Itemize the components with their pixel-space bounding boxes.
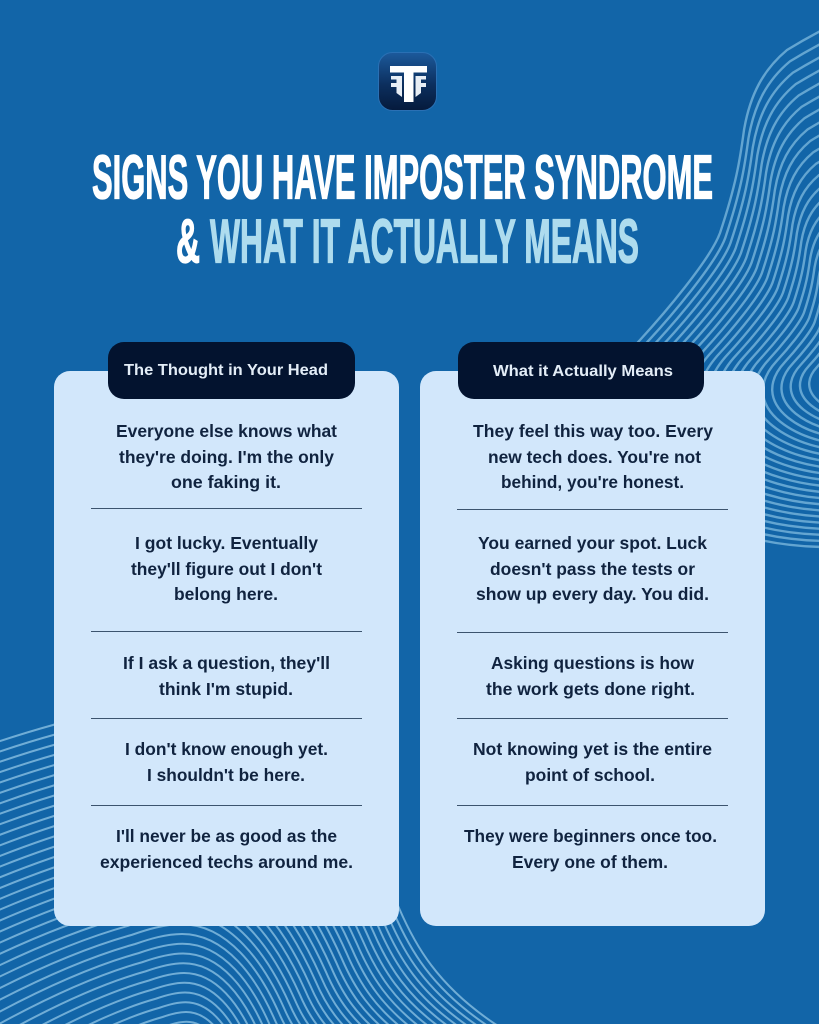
header pill: The Thought in Your Head (124, 362, 328, 379)
card (420, 371, 765, 926)
meaning 5: They were beginners once too. (464, 826, 717, 846)
meaning 5: Every one of them. (512, 852, 668, 872)
thought 1: one faking it. (171, 472, 281, 492)
thought 3: If I ask a question, they'll (123, 653, 330, 673)
panel: what it actually means (420, 342, 765, 926)
header pill (458, 342, 704, 399)
meaning 1 (473, 421, 713, 492)
thought 2: I got lucky. Eventually (135, 533, 318, 553)
icon: logo (378, 52, 436, 110)
meaning 1: They feel this way too. Every (473, 421, 713, 441)
header pill: What it Actually Means (493, 363, 673, 380)
thought 2 (131, 533, 322, 604)
thought 1: they're doing. I'm the only (119, 447, 334, 467)
title line 2: & (176, 208, 200, 276)
card (54, 371, 399, 926)
thought 4 (125, 739, 328, 785)
meaning 1: new tech does. You're not (488, 447, 701, 467)
title line 2 (176, 208, 639, 276)
meaning 4: Not knowing yet is the entire (473, 739, 712, 759)
thought 5 (100, 826, 353, 872)
contour lines: bottom left (0, 724, 497, 1024)
thought 2: they'll figure out I don't (131, 559, 322, 579)
panel: the thought in your head (54, 342, 399, 926)
meaning 4 (473, 739, 712, 785)
meaning 1: behind, you're honest. (501, 472, 684, 492)
meaning 2: doesn't pass the tests or (490, 559, 695, 579)
title (92, 144, 713, 276)
meaning 2: You earned your spot. Luck (478, 533, 707, 553)
meaning 5 (464, 826, 717, 872)
meaning 3 (486, 653, 695, 699)
thought 5: I'll never be as good as the (116, 826, 337, 846)
meaning 4: point of school. (525, 765, 655, 785)
meaning 2 (476, 533, 709, 604)
thought 1: Everyone else knows what (116, 421, 337, 441)
thought 5: experienced techs around me. (100, 852, 353, 872)
meaning 3: Asking questions is how (491, 653, 694, 673)
thought 4: I shouldn't be here. (147, 765, 305, 785)
header pill (108, 342, 355, 399)
meaning 2: show up every day. You did. (476, 584, 709, 604)
thought 2: belong here. (174, 584, 278, 604)
thought 3: think I'm stupid. (159, 679, 293, 699)
thought 1 (116, 421, 337, 492)
thought 4: I don't know enough yet. (125, 739, 328, 759)
contour lines: top right (636, 30, 819, 548)
meaning 3: the work gets done right. (486, 679, 695, 699)
thought 3 (123, 653, 330, 699)
